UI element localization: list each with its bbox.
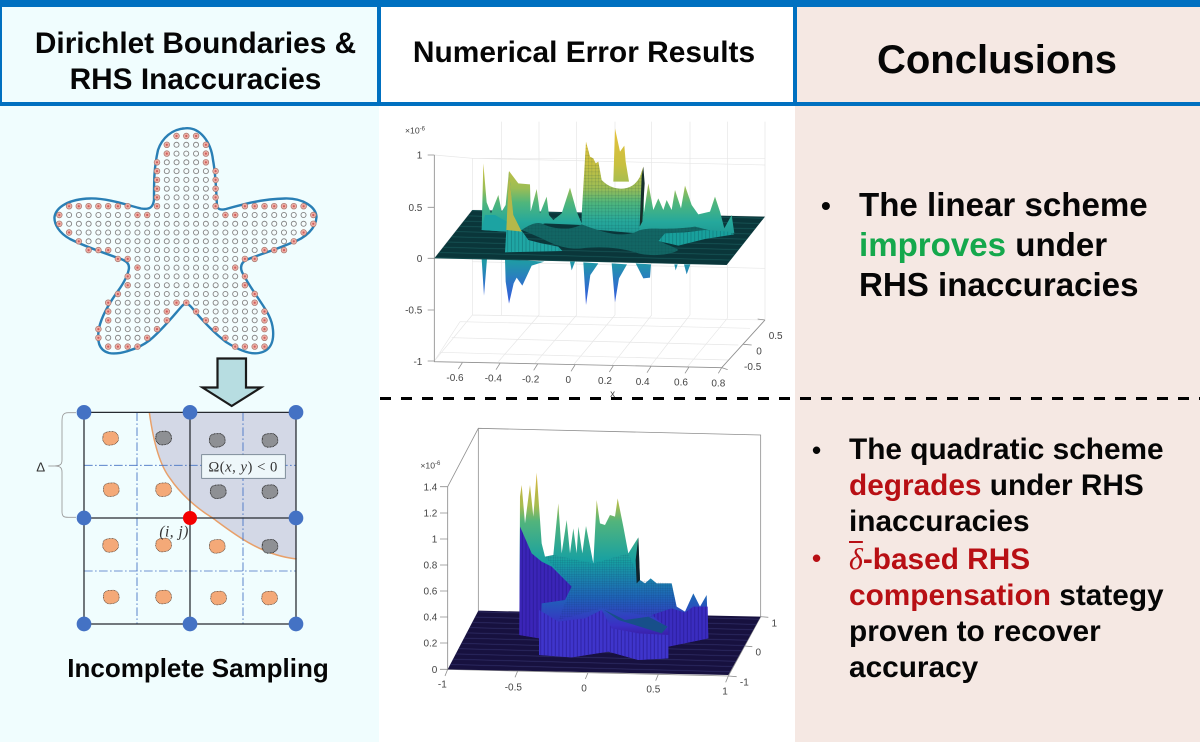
left wall: [519, 527, 572, 638]
tick labels: -1: [413, 357, 423, 368]
tick labels: 0.4: [423, 613, 438, 624]
tick labels: 0.8: [711, 379, 726, 390]
bullet text: improves under: [859, 227, 1107, 264]
downward spikes: [482, 259, 690, 305]
tick labels: 0.2: [423, 639, 438, 650]
tick labels: -0.5: [505, 683, 522, 694]
heading: Dirichlet Boundaries and RHS Inaccuracies: [35, 27, 356, 96]
bullet text with delta: proven to recover: [849, 615, 1101, 648]
shaded outside-domain region: [149, 412, 297, 559]
tick labels: 1: [772, 619, 778, 630]
node (i,j): [159, 511, 197, 541]
tick labels: 1.4: [423, 482, 438, 493]
tick labels: 0: [417, 254, 423, 265]
back spike walls: [482, 163, 734, 235]
tick labels: -0.6: [446, 373, 464, 384]
diagram: incomplete sampling grid: [36, 405, 303, 631]
tick labels: 1: [417, 151, 423, 162]
tick labels: x: [610, 389, 615, 400]
bullet text: degrades under RHS: [849, 469, 1144, 502]
arrow: star domain to sampling cell: [202, 358, 261, 406]
red bullet: •: [812, 543, 821, 573]
tick labels: -0.5: [405, 306, 423, 317]
chart: 3D error surface, quadratic scheme: [420, 428, 778, 697]
axes and grid: [434, 122, 765, 368]
star surface: [522, 223, 718, 255]
orange samples: [103, 431, 277, 605]
tick labels: 0: [756, 648, 762, 659]
panel: right column background: [795, 0, 1200, 742]
tick labels: 0.5: [769, 331, 783, 342]
caption: Incomplete Sampling: Incomplete Sampling: [67, 653, 329, 683]
tick labels: ×10: [420, 460, 435, 470]
bullet text: [849, 433, 1164, 538]
right wall: [652, 607, 708, 647]
bullet text: The linear scheme: [859, 187, 1148, 224]
tick labels: [405, 126, 783, 400]
brace: delta spacing: [36, 413, 76, 517]
axes and box: [448, 428, 761, 617]
bullet: •: [812, 435, 821, 465]
tick labels: 0: [581, 684, 587, 695]
tick labels: -0.2: [522, 374, 540, 385]
bullet: •: [821, 190, 831, 221]
front wall: [539, 610, 668, 660]
grey samples: [156, 431, 278, 553]
chart: 3D error surface, linear scheme: [405, 122, 783, 400]
brace: delta spacing: Δ: [36, 460, 45, 475]
tick labels: -0.5: [744, 362, 762, 373]
front spike wall, right: [658, 230, 734, 246]
bullet text with delta: accuracy: [849, 651, 978, 684]
flat plate: [434, 210, 765, 265]
bullet text with delta: δ-based RHS: [849, 542, 1030, 576]
tick labels: 1: [722, 686, 728, 697]
tick labels: 0: [432, 665, 438, 676]
tick labels: 0.4: [636, 377, 650, 388]
tick labels: 0.5: [646, 685, 661, 696]
bullet text with delta: [849, 541, 1164, 684]
heading: Dirichlet Boundaries and RHS Inaccuracies: Dirichlet Boundaries &: [35, 27, 356, 60]
bullet text: [859, 187, 1148, 304]
panel: left column background: [0, 0, 379, 742]
front spike wall, left: [505, 172, 562, 252]
tick labels: [420, 460, 778, 697]
bullet text: The quadratic scheme: [849, 433, 1164, 466]
bullet text: RHS inaccuracies: [859, 267, 1138, 304]
tick labels: 0.2: [598, 376, 612, 387]
domain boundary curve: [149, 412, 297, 559]
panel: middle column background: [379, 0, 795, 742]
heading: Numerical Error Results: Numerical Error Results: [413, 36, 755, 69]
central concave wall: [582, 142, 644, 233]
tick labels: 0.6: [674, 378, 688, 389]
bullet text with delta: compensation stategy: [849, 579, 1164, 612]
tick labels: 0: [756, 346, 762, 357]
bullet text: inaccuracies: [849, 505, 1030, 538]
interior grid points: [69, 145, 304, 338]
tick labels: 0.8: [423, 561, 438, 572]
node (i,j): (i, j): [159, 524, 188, 541]
grid nodes: [77, 405, 303, 631]
tick labels: -6: [420, 126, 426, 132]
spiky surface silhouette: [519, 473, 708, 660]
tick labels: 0: [566, 375, 572, 386]
tick labels: 0.5: [408, 203, 423, 214]
label: Omega less than zero: Ω(x, y) < 0: [208, 460, 277, 476]
rear spike behind central wall: [613, 128, 629, 182]
tick labels: ×10: [405, 126, 420, 136]
boundary grid points: [59, 136, 313, 347]
header frame: blue rules: [0, 0, 1200, 106]
text block: conclusions on the quadratic scheme: [812, 433, 1164, 684]
tick labels: -1: [740, 678, 749, 689]
heading: Conclusions: Conclusions: [877, 38, 1117, 82]
tick labels: 1: [432, 535, 438, 546]
tick labels: 0.6: [423, 587, 438, 598]
dashed divider: [380, 397, 1200, 400]
star domain outline: [54, 128, 317, 353]
heading: Dirichlet Boundaries and RHS Inaccuracies: RHS Inaccuracies: [70, 63, 321, 96]
tick labels: 1.2: [423, 509, 438, 520]
tick labels: -1: [438, 680, 447, 691]
diagram: star-shaped domain with sampling grid: [54, 128, 317, 353]
label: Omega less than zero: [202, 455, 285, 478]
tick labels: -0.4: [485, 374, 502, 385]
flat plate: [448, 611, 761, 675]
text block: conclusion on the linear scheme: [821, 187, 1148, 304]
tick labels: -6: [435, 461, 441, 467]
